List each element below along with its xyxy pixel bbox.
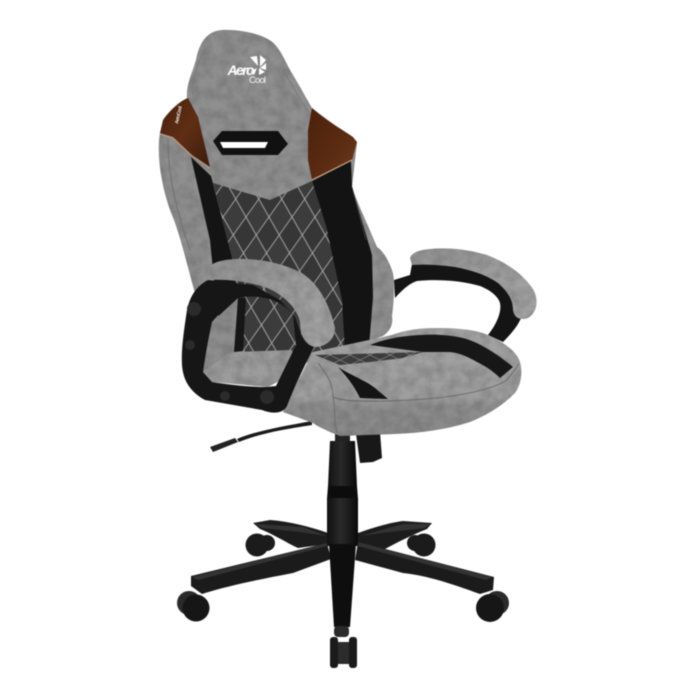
headrest slot bbox=[213, 131, 288, 155]
gas lift lever bbox=[210, 421, 312, 452]
seat mesh panel bbox=[315, 352, 423, 365]
logo fan icon bbox=[250, 55, 266, 75]
seat black band bbox=[370, 335, 513, 378]
frame bolts bbox=[185, 302, 274, 404]
left armrest pad bbox=[207, 259, 335, 347]
left armrest frame bbox=[182, 280, 314, 413]
inner bolster below arm bbox=[203, 298, 238, 372]
tilt knob bbox=[356, 432, 382, 463]
right black centre strip bbox=[312, 161, 373, 352]
left inner seat bbox=[203, 350, 296, 387]
left black side strip bbox=[191, 157, 247, 350]
logo: Cool bbox=[249, 75, 266, 86]
seat lower black wedge bbox=[338, 367, 388, 399]
right brown bolster bbox=[308, 108, 357, 180]
front casters bbox=[177, 591, 509, 668]
chair illustration bbox=[159, 30, 537, 668]
brand tag: AeroCool bbox=[174, 105, 184, 124]
right armrest frame bbox=[394, 262, 521, 342]
seat stitching bbox=[333, 364, 519, 401]
front base legs bbox=[191, 542, 494, 627]
backrest fabric bbox=[159, 30, 394, 372]
rear base legs bbox=[253, 520, 432, 549]
logo: Aero bbox=[226, 62, 255, 78]
gas lift column bbox=[327, 432, 358, 546]
seat cushion bbox=[283, 328, 521, 436]
logo bbox=[226, 55, 266, 86]
left brown bolster bbox=[160, 98, 210, 168]
backrest stitching bbox=[168, 140, 190, 250]
rear casters bbox=[246, 534, 436, 556]
right armrest pad bbox=[410, 248, 537, 319]
quilted centre panel bbox=[213, 181, 345, 352]
quilted panel below arm bbox=[242, 297, 296, 350]
